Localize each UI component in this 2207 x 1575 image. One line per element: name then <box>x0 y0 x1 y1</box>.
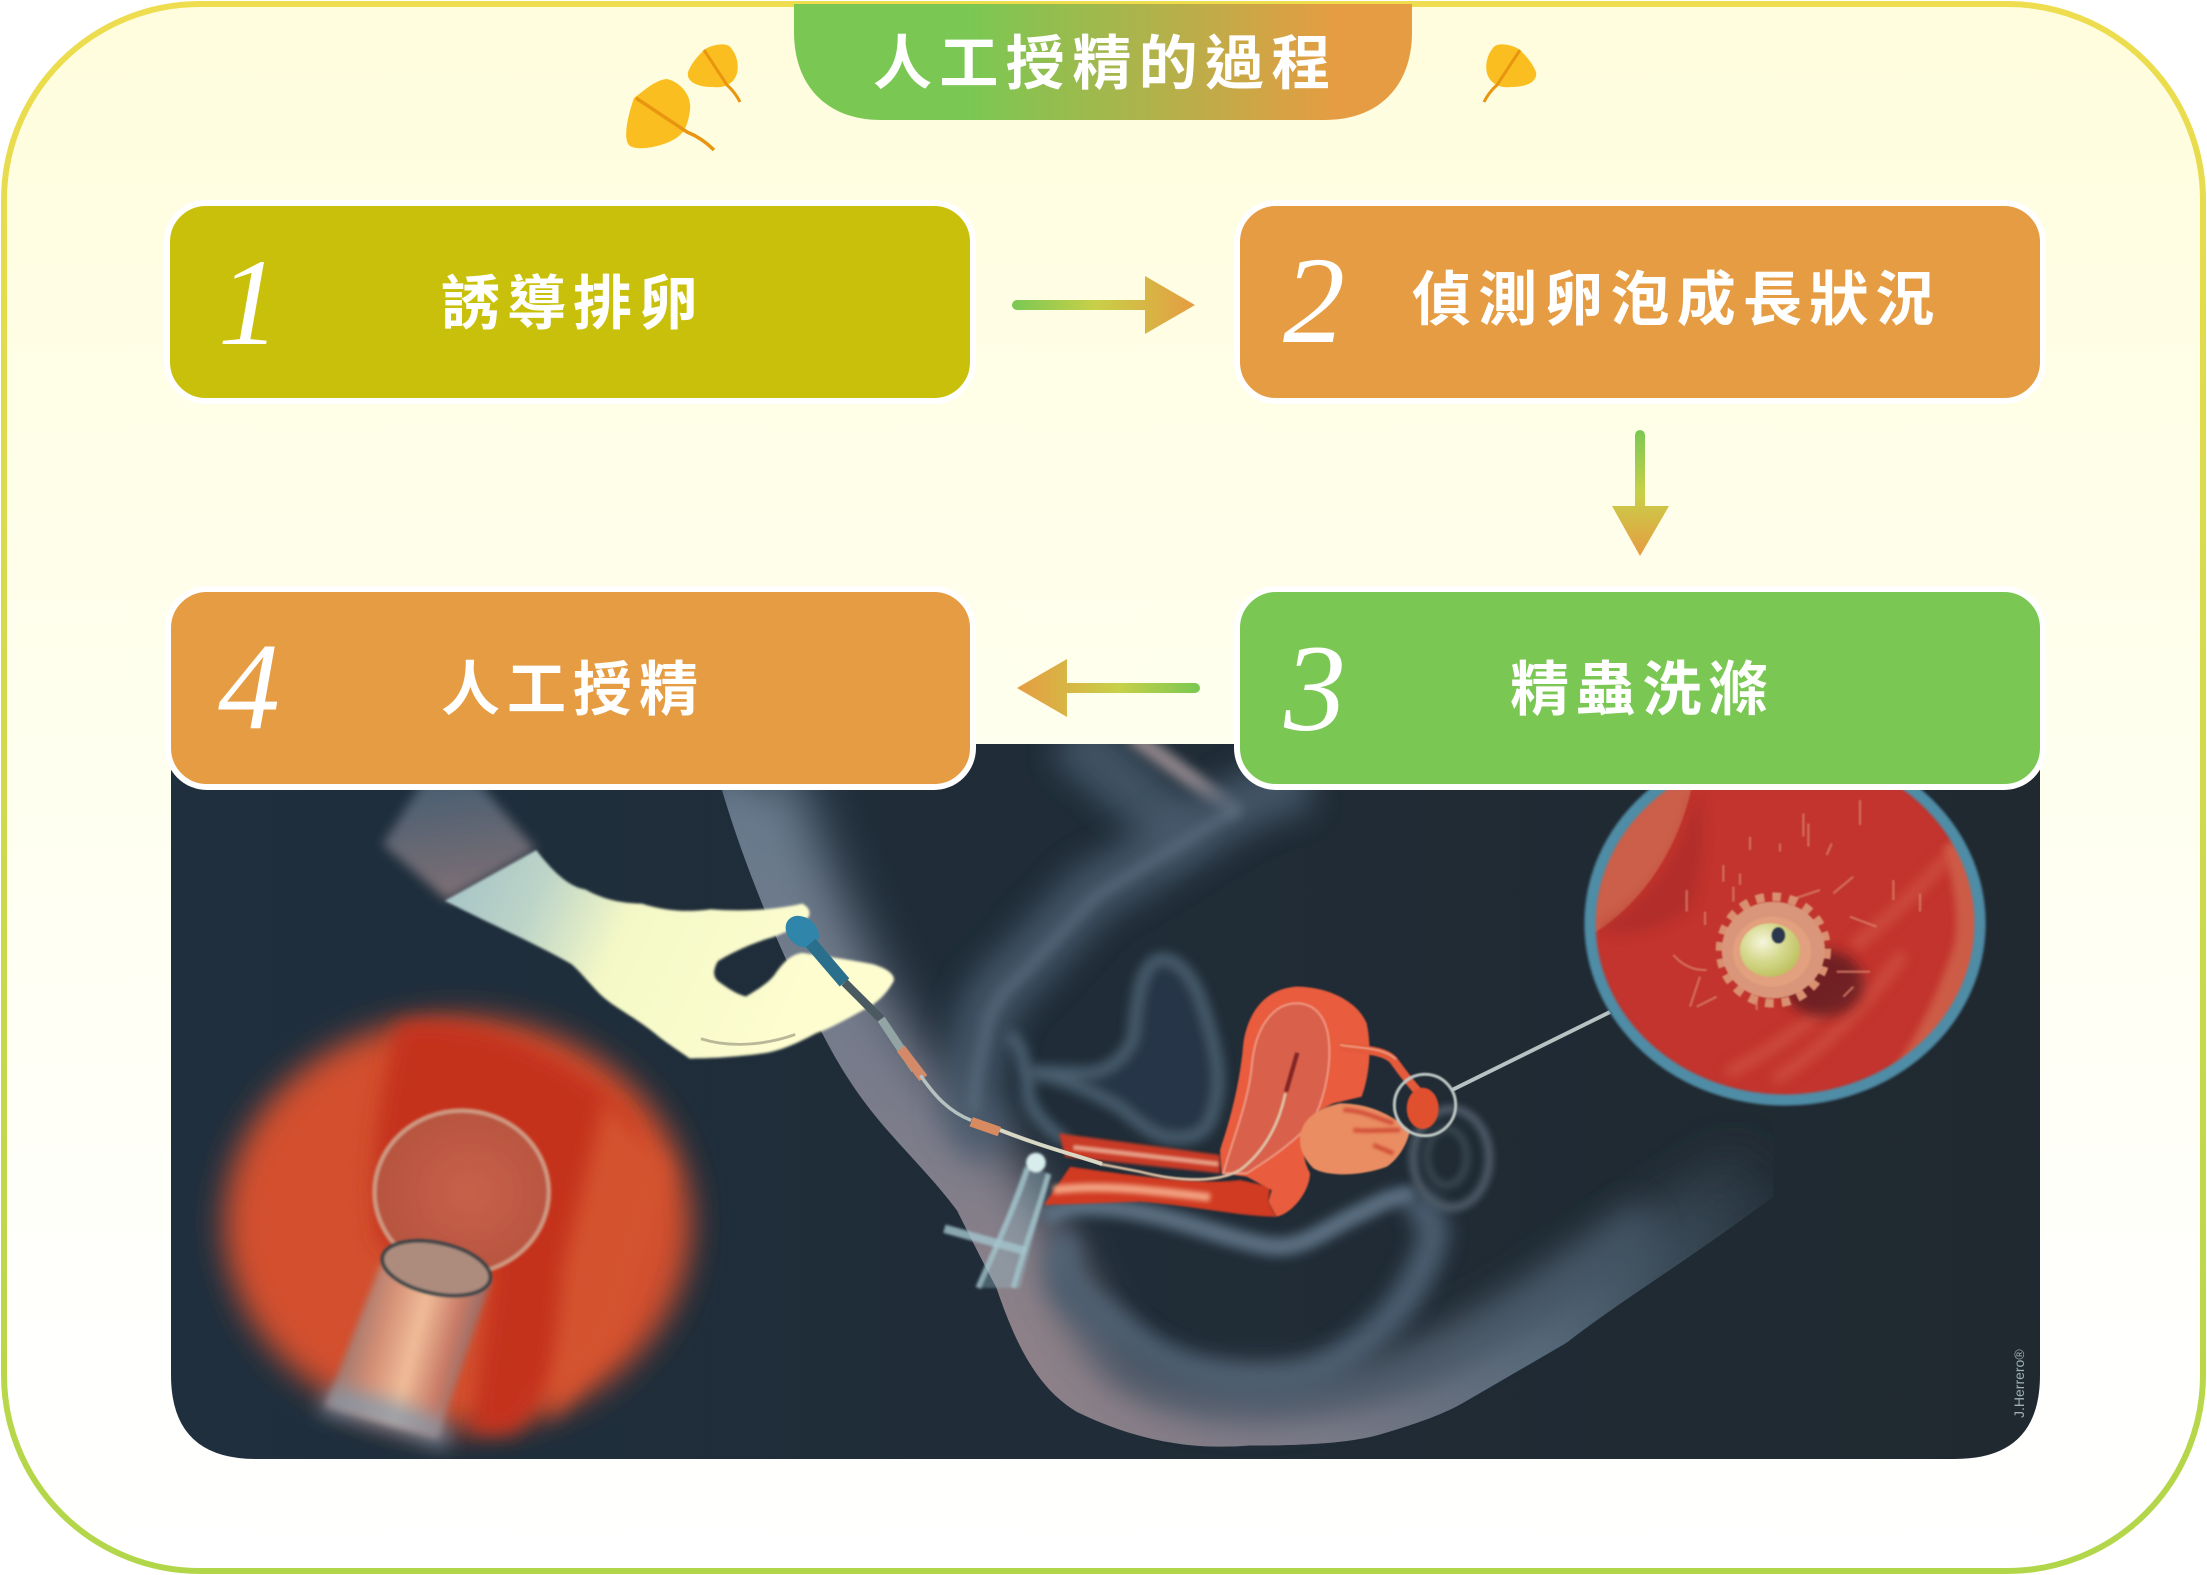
step 4 box <box>168 589 973 787</box>
title text: 人工授精的過程 <box>873 31 1338 97</box>
step 3 number: 3 <box>1283 620 1346 757</box>
step 1 label: 誘導排卵 <box>441 271 705 337</box>
fertilised sphere <box>374 1111 549 1274</box>
pelvic fold inner outline <box>1008 1035 1067 1141</box>
icon: ginkgo leaf large <box>626 79 714 150</box>
title banner <box>794 4 1412 120</box>
insemination tube <box>318 1232 495 1450</box>
step 2 number: 2 <box>1283 232 1345 369</box>
signature: J.Herrero® <box>2011 1349 2027 1418</box>
glove <box>445 850 894 1058</box>
leader line <box>1452 1012 1610 1090</box>
step 2 box <box>1237 203 2043 401</box>
magnifier ring <box>1590 747 1980 1100</box>
step 1 box <box>167 203 973 401</box>
catheter entry <box>1000 1130 1102 1164</box>
zoom ring <box>1394 1074 1456 1136</box>
speculum <box>944 1153 1050 1288</box>
step 3 box <box>1237 589 2043 787</box>
egg <box>1720 897 1827 1003</box>
rectum <box>1413 1109 1489 1208</box>
arrow: step 2 to step 3 <box>1612 435 1669 556</box>
far leg band <box>1070 735 1239 839</box>
arrow: step 3 to step 4 <box>1017 659 1195 717</box>
body silhouette <box>721 783 1773 1446</box>
step 1 number: 1 <box>218 234 280 371</box>
catheter <box>1100 1093 1285 1179</box>
vaginal canal <box>1044 1133 1277 1217</box>
step 2 label: 偵測卵泡成長狀況 <box>1412 267 1942 333</box>
arrow: step 1 to step 2 <box>1017 276 1195 334</box>
lower body folds <box>1044 1196 1415 1247</box>
sleeve <box>383 783 536 901</box>
step 3 label: 精蟲洗滌 <box>1510 657 1775 723</box>
left magnified view: sperm entering uterus via tube <box>224 1018 691 1450</box>
reproductive organs <box>1044 987 1456 1217</box>
icon: ginkgo leaf small <box>688 44 740 102</box>
illustration: insemination procedure <box>171 735 2040 1459</box>
step 4 number: 4 <box>218 618 280 755</box>
gloved hand with syringe <box>383 783 999 1132</box>
bladder <box>1029 958 1219 1139</box>
right magnified view: egg and sperm <box>1582 790 1988 1108</box>
uterus <box>1220 987 1439 1217</box>
step 4 label: 人工授精 <box>441 657 705 723</box>
icon: ginkgo leaf right <box>1484 44 1536 102</box>
ovary <box>1300 1103 1410 1174</box>
syringe <box>779 909 999 1132</box>
